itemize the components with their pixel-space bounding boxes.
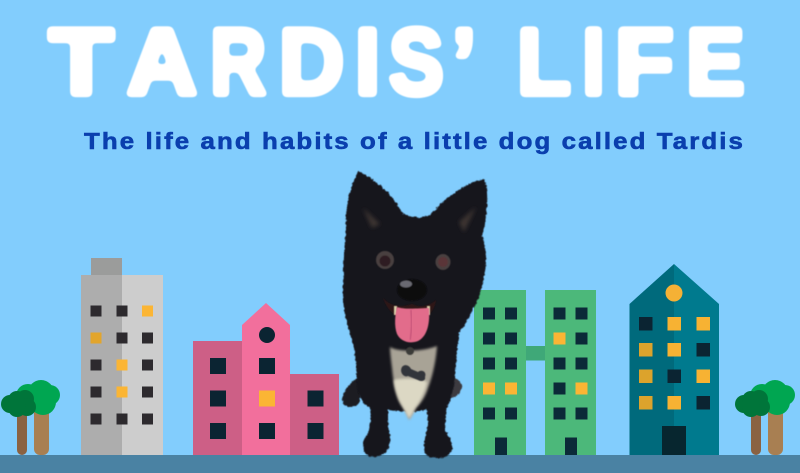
teal building bbox=[630, 264, 719, 455]
title: T bbox=[49, 10, 113, 115]
title: ’ bbox=[452, 9, 476, 114]
dog mouth bbox=[383, 298, 436, 320]
title: E bbox=[686, 10, 744, 115]
dog chest bbox=[390, 346, 437, 420]
dog bbox=[342, 172, 487, 458]
dog ear inner bbox=[363, 207, 476, 232]
right trees bbox=[735, 380, 795, 455]
title: S bbox=[389, 9, 444, 114]
dog back paws bbox=[342, 378, 462, 407]
ground bbox=[0, 455, 800, 473]
gray tower bbox=[81, 258, 163, 455]
green twin towers bbox=[474, 290, 596, 455]
title: I bbox=[355, 10, 380, 115]
dog tongue bbox=[395, 307, 429, 342]
title: D bbox=[279, 10, 344, 114]
dog silhouette bbox=[343, 172, 487, 458]
dog tongue crease bbox=[410, 310, 412, 340]
subtitle: The life and habits of a little dog called Tardis bbox=[84, 129, 743, 155]
title: R bbox=[210, 10, 266, 115]
title: A bbox=[127, 10, 197, 115]
dog bone tag bbox=[401, 365, 425, 381]
title: I bbox=[582, 10, 605, 114]
title bbox=[49, 9, 744, 115]
dog nose bbox=[397, 279, 427, 301]
dog collar tag bbox=[406, 347, 414, 355]
title: L bbox=[517, 10, 571, 115]
dog eyes bbox=[376, 251, 450, 270]
left trees bbox=[1, 380, 60, 455]
dog teeth bbox=[394, 306, 430, 315]
title: F bbox=[615, 10, 674, 115]
pink building bbox=[193, 303, 339, 455]
